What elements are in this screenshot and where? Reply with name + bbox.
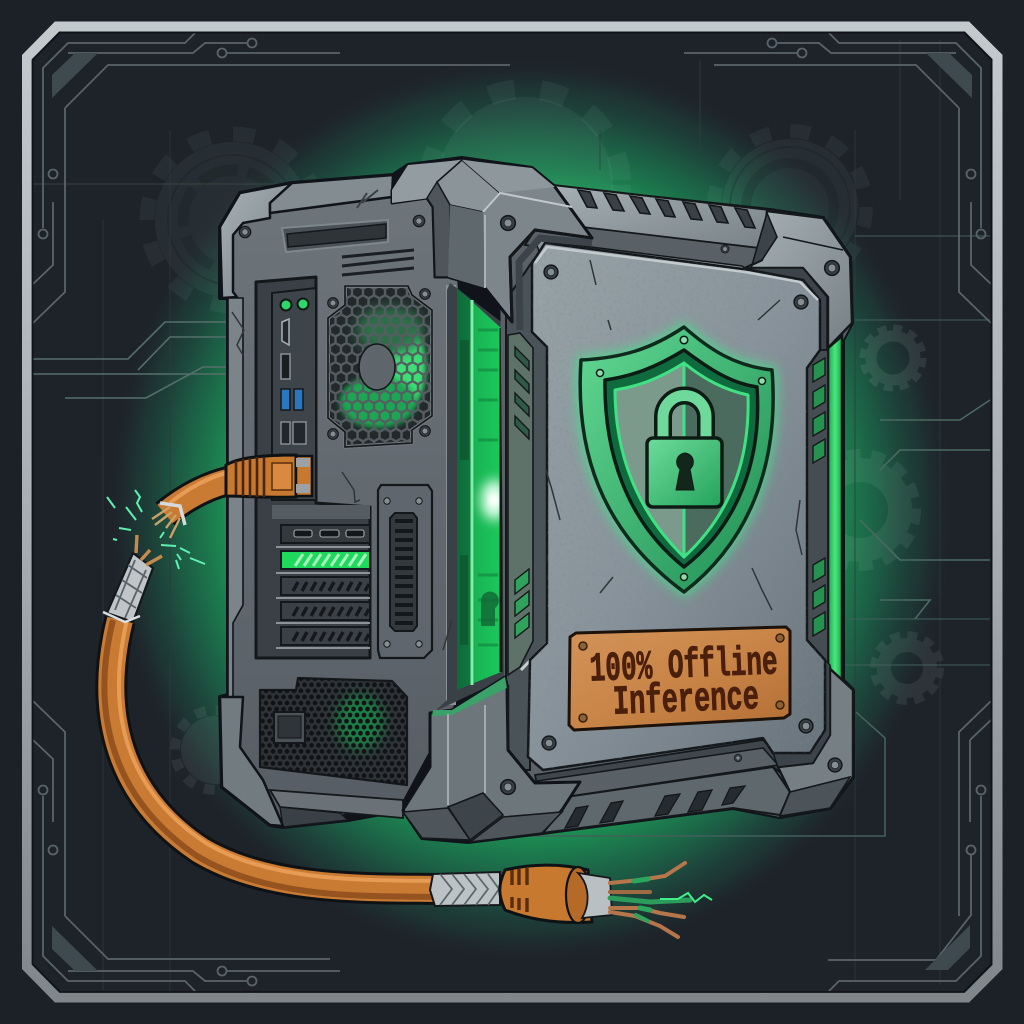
io plate [272, 288, 316, 500]
front metal plate [505, 235, 825, 780]
gear: right middle [804, 454, 916, 566]
connector boot [500, 865, 592, 922]
shield with padlock [580, 327, 773, 592]
cable: lower run [104, 620, 440, 897]
centre top corner [392, 158, 592, 330]
trace bundle: bottom left [33, 701, 340, 991]
panel: rear face [220, 175, 512, 827]
bottom ridge [530, 740, 790, 833]
shield rivets [596, 336, 766, 580]
expansion slots [272, 505, 370, 648]
rj45 boot [226, 455, 296, 497]
right rim [446, 285, 456, 705]
bottom left bumper [220, 697, 283, 826]
frayed cable end bottom [430, 863, 712, 937]
metal speckle [528, 244, 825, 770]
keyhole [676, 453, 694, 490]
plaque text: Inference [612, 675, 760, 727]
braid sleeve [430, 872, 500, 906]
left vent recess [506, 262, 547, 770]
bottom rim [270, 790, 403, 818]
gear: upper right [714, 131, 866, 283]
trace bundle: bottom right [828, 701, 991, 991]
shield inner right [684, 363, 748, 557]
gear: lower left [175, 710, 255, 790]
right vents [813, 358, 825, 636]
green spark [660, 893, 712, 902]
gear: right small lower [874, 635, 940, 701]
usb and ethernet ports [281, 422, 306, 444]
frayed ends [152, 503, 185, 538]
shield rim [580, 327, 773, 592]
top ridge with slots [525, 185, 780, 288]
plaque rivets [579, 634, 784, 722]
top left bracket [220, 183, 292, 298]
screws [239, 226, 251, 238]
gear: upper left [147, 134, 319, 306]
plate cracks [546, 260, 802, 610]
fan grille [328, 286, 432, 447]
silver shielding [578, 873, 612, 918]
computer case [220, 158, 853, 842]
sparks [107, 490, 205, 569]
plaque text: 100% Offline [589, 640, 779, 694]
vent slot rows [281, 577, 370, 595]
trace bundle: top left [33, 33, 510, 323]
scratch top [357, 190, 378, 208]
vent slits [342, 250, 414, 275]
exposed wires [610, 863, 690, 937]
copper plaque [569, 627, 790, 730]
bottom shadow rim [280, 807, 348, 827]
rj45 plug [296, 456, 312, 496]
usb ports blue [281, 389, 303, 410]
panel: right side body [500, 187, 853, 833]
shield inner left [615, 363, 684, 557]
left rim [228, 298, 243, 700]
display port [281, 354, 290, 379]
centre bottom corner [403, 677, 580, 842]
fan hub [359, 344, 395, 390]
shield glow [580, 327, 773, 592]
lower cable braided end [103, 535, 162, 622]
hdmi port [282, 319, 289, 345]
upper cable with connector [152, 455, 312, 538]
top rim [270, 175, 393, 213]
window frame outer [434, 283, 512, 712]
side vent panel [378, 485, 432, 658]
led lights [280, 298, 308, 310]
io cavity [256, 277, 370, 658]
green status slot [281, 551, 370, 569]
gear: top centre [429, 89, 621, 281]
window hot spot [481, 480, 507, 520]
power switch [274, 712, 305, 743]
gear: right small upper [863, 328, 923, 388]
green side window [457, 288, 507, 690]
slot: top [282, 220, 388, 252]
top right corner [745, 211, 852, 350]
trace bundle: top right [684, 33, 991, 323]
background gears [147, 89, 940, 790]
padlock [647, 396, 722, 507]
shield mid band [605, 350, 758, 567]
psu grille [260, 678, 407, 785]
case silhouette [220, 158, 853, 842]
right vent recess and green strip [807, 336, 842, 680]
green backlight glow [100, 50, 960, 970]
cracks [232, 312, 452, 650]
bottom right corner [773, 660, 853, 817]
plate screws [544, 265, 558, 279]
